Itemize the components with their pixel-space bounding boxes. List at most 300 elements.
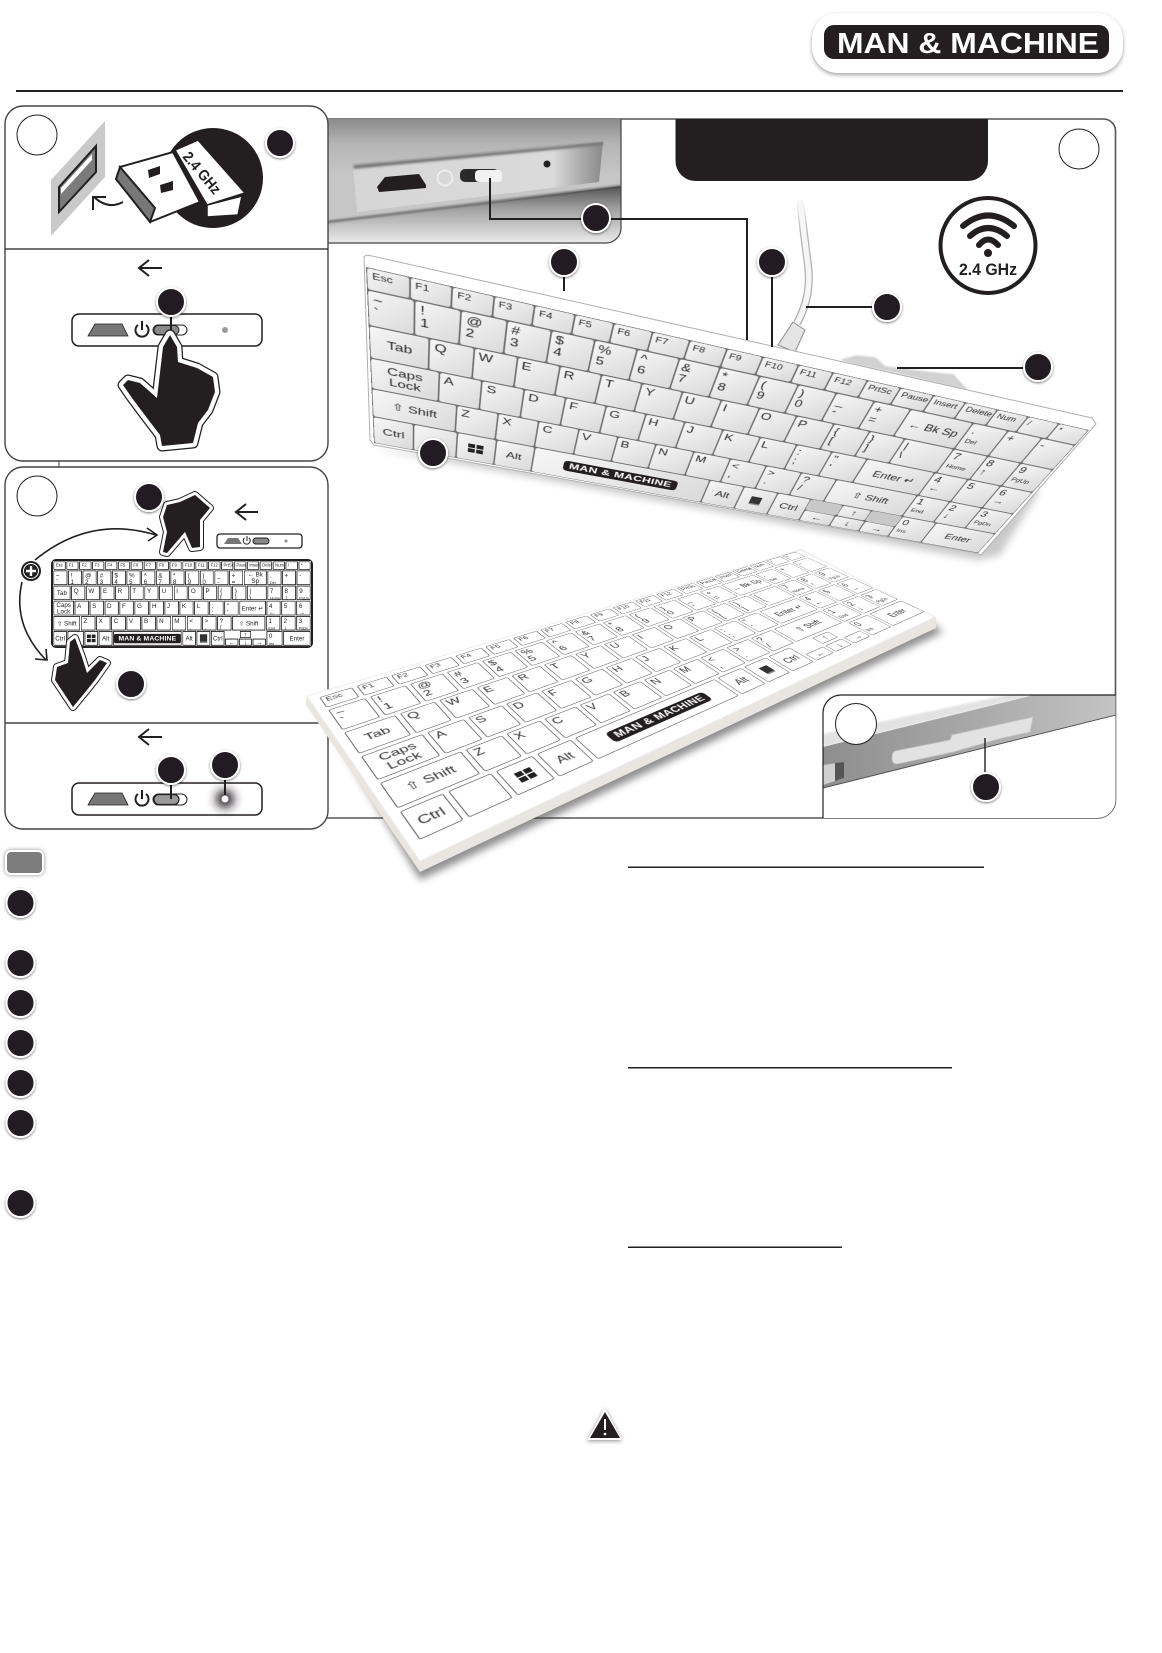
shift key row: N bbox=[657, 446, 669, 457]
home key row: G bbox=[579, 675, 596, 685]
photo inset: power switch bbox=[327, 119, 622, 250]
shift key row: . bbox=[205, 624, 206, 631]
function key row: F11 bbox=[638, 598, 653, 604]
section rule three bbox=[628, 1246, 842, 1248]
qwerty key row: PgUp bbox=[1009, 476, 1031, 485]
number key row: 2 bbox=[465, 326, 475, 340]
qwerty key row: R bbox=[515, 672, 531, 682]
function key row: Pause bbox=[699, 578, 718, 585]
home key row: F bbox=[568, 400, 579, 413]
number key row: ( bbox=[188, 572, 190, 579]
qwerty key row bbox=[54, 586, 310, 600]
icon: 2.4 GHz USB dongle bbox=[116, 128, 263, 228]
home key row: ' bbox=[749, 624, 759, 630]
shift key row: 3 bbox=[978, 510, 991, 519]
home key row: ' bbox=[826, 463, 833, 472]
space key row: 0 bbox=[269, 633, 272, 640]
number key row: _ bbox=[680, 597, 693, 604]
home key row: J bbox=[685, 424, 695, 436]
qwerty key row: E bbox=[481, 684, 496, 694]
qwerty key row: O bbox=[191, 587, 196, 594]
qwerty key row: ↑ bbox=[806, 582, 818, 587]
icon: plus symbol bbox=[21, 561, 41, 581]
section rule two bbox=[628, 1067, 952, 1068]
function key row: Num bbox=[752, 563, 767, 568]
qwerty key row: \ bbox=[896, 450, 906, 460]
step circle: main panel bbox=[1059, 129, 1099, 169]
space key row bbox=[400, 601, 924, 840]
shift key row: ↓ bbox=[284, 624, 287, 631]
home key row: 6 bbox=[996, 488, 1009, 498]
number key row: 4 bbox=[552, 345, 563, 359]
function key row: F5 bbox=[489, 644, 502, 651]
number key row: & bbox=[158, 572, 163, 579]
shift key row: PgDn bbox=[875, 597, 890, 604]
number key row: ← Bk Sp bbox=[248, 571, 263, 585]
photo inset border bbox=[327, 119, 621, 243]
number key row: - bbox=[1037, 440, 1048, 451]
home key row: 4 bbox=[932, 475, 944, 485]
home key row: H bbox=[610, 664, 626, 674]
qwerty key row: U bbox=[162, 587, 166, 594]
step circle: A bbox=[17, 115, 57, 155]
home key row: ; bbox=[725, 632, 737, 639]
space key row: Alt bbox=[102, 635, 109, 642]
shift key row: 1 bbox=[268, 617, 272, 624]
step circle: B bbox=[17, 476, 57, 516]
number key row: 0 bbox=[792, 398, 805, 410]
qwerty key row: \ bbox=[249, 594, 251, 600]
shift key row: B bbox=[144, 617, 148, 624]
number key row bbox=[54, 570, 310, 585]
number key row: 2 bbox=[85, 578, 89, 585]
number key row: 7 bbox=[585, 635, 599, 642]
home key row: L bbox=[692, 635, 706, 643]
header logo: MAN & MACHINE bbox=[837, 28, 1099, 60]
shift key row: / bbox=[796, 483, 804, 492]
qwerty key row: W bbox=[478, 350, 494, 365]
space key row: 0 bbox=[900, 518, 912, 527]
number key row: - bbox=[217, 578, 219, 585]
space key row: → bbox=[869, 524, 885, 534]
home key row: → bbox=[847, 585, 862, 592]
shift key row bbox=[372, 390, 1012, 534]
space key row: ↑ bbox=[818, 634, 832, 641]
home key row: ; bbox=[212, 609, 214, 616]
number key row: Del bbox=[768, 577, 779, 582]
function key row: F3 bbox=[498, 299, 513, 312]
shift key row: / bbox=[763, 642, 775, 649]
home key row: L bbox=[759, 440, 771, 450]
number key row: 4 bbox=[492, 665, 506, 674]
number key row: - bbox=[688, 602, 698, 608]
callout lines bbox=[171, 178, 1038, 799]
home key row: D bbox=[107, 602, 112, 609]
qwerty key row: 8 bbox=[983, 458, 997, 468]
space key row: ↓ bbox=[244, 639, 247, 646]
function key row: F10 bbox=[763, 359, 785, 372]
qwerty key row: ] bbox=[739, 606, 749, 611]
function key row: Insert bbox=[717, 573, 734, 579]
function key row: F6 bbox=[517, 635, 530, 642]
shift key row: Z bbox=[471, 745, 487, 758]
number key row: * bbox=[720, 370, 729, 383]
space key row: Enter bbox=[942, 532, 973, 544]
shift key row: < bbox=[189, 617, 193, 624]
number key row: & bbox=[578, 629, 592, 637]
space key row: Alt bbox=[731, 675, 752, 686]
function key row: F4 bbox=[459, 653, 473, 660]
home key row: ← bbox=[810, 599, 826, 606]
space key row: 0 bbox=[851, 621, 865, 628]
function key row: F4 bbox=[538, 308, 553, 321]
number key row: 4 bbox=[114, 578, 118, 585]
function key row: F5 bbox=[578, 317, 593, 330]
function key row: PrtSc bbox=[866, 383, 894, 396]
space key row: ← bbox=[811, 649, 828, 658]
number key row: ` bbox=[56, 578, 58, 585]
function key row: * bbox=[784, 555, 791, 558]
arc arrows between keys bbox=[20, 528, 157, 660]
qwerty key row: \ bbox=[760, 598, 770, 604]
home key row: H bbox=[647, 417, 660, 429]
number key row: = bbox=[232, 578, 235, 585]
space key row: ↓ bbox=[832, 641, 846, 649]
function key row: Insert bbox=[932, 398, 960, 411]
black title tab bbox=[676, 119, 988, 181]
shift key row: M bbox=[676, 665, 694, 675]
top keyboard body bbox=[364, 255, 1096, 560]
number key row: = bbox=[866, 414, 879, 425]
arrow: slide left, confirm bbox=[139, 729, 162, 745]
function key row: F12 bbox=[659, 591, 674, 597]
icon: hand pressing Fn key bbox=[55, 638, 107, 707]
function key row: F9 bbox=[593, 612, 605, 618]
number key row: # bbox=[511, 324, 521, 338]
number key row: ← Bk Sp bbox=[906, 419, 961, 439]
qwerty key row: 8 bbox=[285, 587, 288, 594]
home key row: Caps bbox=[56, 601, 71, 608]
home key row: Enter ↵ bbox=[242, 605, 263, 612]
space key row: MAN & MACHINE bbox=[568, 462, 673, 489]
shift key row: ⇧ Shift bbox=[57, 620, 77, 627]
function key row: Esc bbox=[56, 563, 63, 568]
shift key row: > bbox=[205, 617, 208, 624]
home key row bbox=[370, 358, 1032, 514]
number key row: ~ bbox=[373, 293, 383, 309]
icon: pointing hand on switch bbox=[123, 335, 215, 446]
qwerty key row: Home bbox=[944, 463, 968, 472]
function key row: F8 bbox=[159, 563, 164, 568]
shift key row: B bbox=[619, 439, 631, 450]
qwerty key row: Tab bbox=[362, 725, 393, 742]
qwerty key row: E bbox=[103, 587, 107, 594]
shift key row: PgDn bbox=[299, 626, 308, 630]
number key row: ~ bbox=[333, 707, 348, 718]
function key row: F2 bbox=[457, 290, 472, 303]
number key row: ( bbox=[759, 379, 768, 391]
home key row: 5 bbox=[821, 589, 833, 595]
shift key row: ↓ bbox=[853, 605, 866, 611]
number key row: * bbox=[173, 572, 175, 579]
number key row: 9 bbox=[754, 389, 767, 402]
shift key row: , bbox=[189, 624, 191, 631]
number key row: 5 bbox=[525, 654, 539, 663]
qwerty key row: { bbox=[832, 426, 842, 437]
function key row: Pause bbox=[899, 390, 931, 404]
home key row: Enter ↵ bbox=[772, 603, 806, 618]
qwerty key row: } bbox=[731, 601, 742, 607]
number key row: Del bbox=[270, 581, 276, 585]
number key row: ^ bbox=[144, 572, 147, 579]
shift key row: C bbox=[549, 715, 566, 726]
number key row: ) bbox=[657, 605, 667, 611]
function key row: F8 bbox=[569, 620, 581, 626]
number key row: 5 bbox=[129, 578, 133, 585]
function key row: F2 bbox=[395, 672, 410, 680]
home key row: " bbox=[227, 602, 229, 609]
home key row: J bbox=[639, 655, 652, 663]
space key row: Enter bbox=[289, 635, 304, 642]
function key row: F8 bbox=[691, 343, 707, 355]
step circle: pairing inset bbox=[836, 704, 876, 744]
mini keyboard frame bbox=[51, 559, 313, 648]
number key row: 0 bbox=[664, 609, 677, 616]
qwerty key row: R bbox=[118, 587, 122, 594]
qwerty key row: Y bbox=[644, 386, 656, 399]
number key row: # bbox=[100, 572, 103, 579]
space key row: ↓ bbox=[842, 519, 852, 528]
shift key row: B bbox=[617, 689, 633, 699]
qwerty key row: W bbox=[444, 695, 463, 707]
icon: hand pressing from above bbox=[163, 495, 210, 553]
space key row: Ctrl bbox=[414, 805, 449, 827]
top keyboard photo bbox=[366, 267, 1089, 553]
qwerty key row: O bbox=[661, 623, 676, 631]
function key row: * bbox=[1055, 426, 1065, 434]
shift key row: ? bbox=[800, 475, 812, 485]
number key row: $ bbox=[554, 333, 565, 347]
shift key row: M bbox=[174, 617, 179, 624]
number key row: - bbox=[299, 572, 301, 579]
qwerty key row: Q bbox=[434, 341, 447, 356]
qwerty key row: P bbox=[206, 587, 210, 594]
shift key row: C bbox=[114, 617, 118, 624]
qwerty key row: [ bbox=[220, 594, 222, 600]
arrow: slide left bbox=[139, 260, 162, 276]
icon: warning triangle bbox=[587, 1408, 622, 1440]
number key row: % bbox=[129, 572, 135, 579]
qwerty key row: ↑ bbox=[977, 467, 990, 477]
home key row: J bbox=[167, 602, 170, 609]
icon: 2.4 GHz USB dongle: 2.4 GHz bbox=[179, 149, 224, 198]
shift key row: ⇧ Shift bbox=[792, 619, 824, 633]
space key row: Alt bbox=[185, 635, 193, 642]
number key row: = bbox=[710, 594, 723, 601]
shift key row: N bbox=[159, 617, 164, 624]
shift key row: End bbox=[837, 613, 850, 619]
home key row: F bbox=[122, 602, 126, 609]
qwerty key row bbox=[344, 568, 849, 754]
home key row: S bbox=[486, 384, 497, 396]
qwerty key row: | bbox=[249, 587, 251, 594]
home key row: Enter ↵ bbox=[870, 469, 917, 486]
home key row: : bbox=[795, 447, 804, 457]
shift key row: < bbox=[730, 461, 741, 471]
space key row: Enter bbox=[885, 607, 909, 618]
qwerty key row: R bbox=[563, 368, 575, 382]
number key row: ! bbox=[375, 695, 385, 704]
function key row: F9 bbox=[728, 351, 743, 363]
number key row: - bbox=[829, 406, 839, 417]
function key row: F10 bbox=[185, 563, 192, 568]
header rule bbox=[16, 90, 1123, 92]
function key row: F1 bbox=[415, 280, 429, 294]
function key row: F6 bbox=[616, 326, 632, 338]
qwerty key row: T bbox=[548, 662, 562, 671]
qwerty key row: Tab bbox=[57, 589, 67, 596]
space key row: ← bbox=[809, 513, 825, 523]
shift key row: X bbox=[502, 416, 512, 428]
shift key row: 3 bbox=[863, 594, 875, 599]
qwerty key row: E bbox=[521, 360, 532, 373]
number key row: ← Bk Sp bbox=[728, 578, 764, 592]
qwerty key row: Tab bbox=[387, 339, 412, 357]
home key row: " bbox=[830, 454, 840, 464]
function key row: PrtSc bbox=[679, 584, 697, 591]
home key row: 4 bbox=[269, 602, 272, 609]
home key row: Lock bbox=[384, 750, 424, 772]
qwerty key row: I bbox=[721, 402, 729, 413]
space key row: ↑ bbox=[849, 509, 859, 518]
qwerty key row: PgUp bbox=[299, 596, 309, 600]
number key row: ^ bbox=[639, 352, 649, 365]
number key row: 8 bbox=[716, 381, 728, 393]
icon: USB port bbox=[51, 121, 105, 236]
number key row: ~ bbox=[56, 572, 59, 579]
home key row: K bbox=[182, 602, 186, 609]
qwerty key row bbox=[370, 326, 1052, 492]
shift key row: , bbox=[726, 469, 734, 479]
function key row: Num bbox=[275, 563, 284, 568]
space key row: Ctrl bbox=[777, 501, 800, 512]
qwerty key row: { bbox=[709, 608, 720, 614]
number key row: $ bbox=[114, 572, 118, 579]
qwerty key row: [ bbox=[716, 613, 727, 619]
shift key row: 2 bbox=[947, 504, 959, 513]
qwerty key row: Q bbox=[404, 709, 422, 721]
home key row: D bbox=[528, 392, 540, 405]
shift key row: V bbox=[581, 431, 592, 443]
home key row: S bbox=[92, 602, 96, 609]
home key row: 6 bbox=[299, 602, 302, 609]
number key row: $ bbox=[486, 659, 499, 667]
function key row bbox=[366, 268, 1088, 444]
qwerty key row: U bbox=[607, 641, 623, 650]
qwerty key row: I bbox=[635, 634, 646, 640]
shift key row: PgDn bbox=[972, 520, 993, 527]
home key row: G bbox=[137, 602, 142, 609]
number key row: @ bbox=[466, 314, 483, 330]
shift key row: Z bbox=[461, 408, 470, 420]
qwerty key row: T bbox=[132, 587, 136, 594]
function key row: F7 bbox=[543, 627, 556, 634]
space key row bbox=[54, 631, 310, 646]
qwerty key row: { bbox=[220, 587, 222, 594]
shift key row: X bbox=[99, 617, 103, 624]
mini keyboard diagram bbox=[53, 561, 311, 646]
function key row: F12 bbox=[211, 563, 218, 568]
qwerty key row: Y bbox=[578, 651, 593, 660]
home key row: 5 bbox=[964, 482, 977, 491]
qwerty key row: P bbox=[796, 418, 809, 430]
number key row: # bbox=[451, 670, 465, 679]
home key row: 4 bbox=[802, 596, 814, 602]
shift key row: 3 bbox=[299, 617, 302, 624]
qwerty key row: 9 bbox=[816, 571, 828, 577]
space key row: ↑ bbox=[244, 631, 247, 638]
qwerty key row: O bbox=[759, 410, 774, 423]
function key row bbox=[54, 562, 310, 570]
function key row: F9 bbox=[172, 563, 177, 568]
number key row: . bbox=[270, 572, 272, 579]
number key row: 6 bbox=[636, 363, 647, 376]
panel: main keyboard frame bbox=[327, 119, 1116, 818]
number key row: 8 bbox=[173, 578, 176, 585]
shift key row: ↓ bbox=[941, 511, 952, 520]
home key row: ← bbox=[269, 609, 275, 616]
shift key row: 2 bbox=[844, 601, 857, 607]
function key row: F11 bbox=[198, 563, 205, 568]
function key row: Delete bbox=[735, 567, 753, 574]
qwerty key row: ] bbox=[235, 594, 237, 600]
function key row: Delete bbox=[963, 405, 995, 418]
function key row: Esc bbox=[372, 270, 393, 286]
shift key row: End bbox=[909, 508, 925, 515]
qwerty key row: 8 bbox=[798, 578, 810, 583]
shift key row: . bbox=[761, 476, 769, 485]
number key row: % bbox=[597, 343, 613, 358]
number key row: + bbox=[777, 567, 788, 572]
space key row: Ctrl bbox=[382, 427, 405, 440]
number key row: 5 bbox=[594, 354, 605, 368]
shift key row: > bbox=[766, 468, 777, 478]
number key row: ( bbox=[632, 613, 643, 619]
home key row: 6 bbox=[839, 582, 851, 588]
number key row: + bbox=[232, 572, 235, 579]
number key row bbox=[368, 290, 1074, 470]
number key row: ) bbox=[797, 387, 807, 399]
function key row: F5 bbox=[120, 563, 125, 568]
number key row: @ bbox=[414, 679, 434, 691]
icon: wifi 2.4 GHz badge bbox=[940, 198, 1036, 293]
number key row: 3 bbox=[100, 578, 103, 585]
function key row: F3 bbox=[95, 563, 99, 568]
home key row: → bbox=[990, 496, 1008, 506]
function key row: F3 bbox=[428, 662, 442, 670]
home key row: ' bbox=[227, 609, 228, 616]
home key row: → bbox=[299, 609, 305, 616]
panel: step B pairing bbox=[5, 467, 328, 829]
qwerty key row: Home bbox=[270, 596, 280, 600]
top keyboard stand and cable bbox=[778, 200, 967, 390]
icon: wifi 2.4 GHz badge: 2.4 GHz bbox=[959, 260, 1017, 279]
shift key row: . bbox=[738, 652, 750, 659]
space key row: → bbox=[848, 633, 865, 641]
number key row: * bbox=[606, 621, 617, 628]
qwerty key row: W bbox=[88, 587, 94, 594]
number key row: 1 bbox=[420, 316, 429, 331]
